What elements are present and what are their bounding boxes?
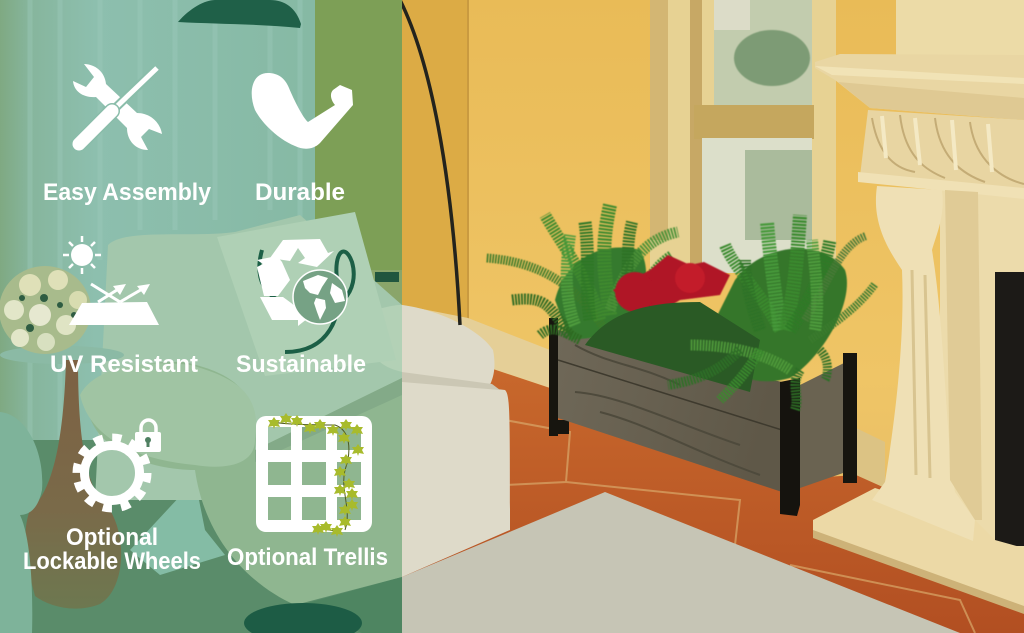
hearth [813,488,1024,612]
dark rug spot [244,603,362,633]
planter with plants [486,205,875,516]
window lower glass [702,138,812,273]
label: Optional Trellis: Optional Trellis [227,544,388,571]
planter back corner post [549,318,558,436]
olive wall area [315,0,402,320]
label: Durable: Durable [255,179,345,206]
label: Optional Lockable Wheels [23,524,201,575]
dark leaves centre [585,302,760,392]
fireplace chimney breast [896,0,1024,56]
pillow swirl [259,250,354,352]
globe [293,270,347,324]
pillow [217,212,396,376]
floor under sofa [300,577,402,633]
window frame [650,0,836,272]
firebox [995,272,1024,546]
red poinsettia [613,255,730,312]
skirting board [402,305,550,388]
icon: UV sun and reflecting surface [63,236,159,325]
small side table top [0,346,124,364]
floor area [0,440,402,633]
label: Easy Assembly: Easy Assembly [43,179,212,206]
fireplace inner wall [940,190,1024,560]
sofa seat and front [88,362,402,605]
sofa back [95,215,402,500]
floor lamp arc [400,0,460,325]
icon: recycling arrows and globe [257,239,347,326]
carved frieze [858,110,1024,199]
fern foliage right [668,215,875,410]
left armchair [0,412,42,633]
label: UV Resistant: UV Resistant [50,351,198,378]
icon: gear with padlock [77,420,161,508]
planter front wood boards [558,330,782,492]
curtain area [0,0,316,440]
label: Sustainable: Sustainable [236,351,366,378]
sofa right side [402,305,510,577]
label: Optional Lockable Wheels: Optional [66,524,158,551]
fern fronds left [486,205,678,340]
foliage mass [486,205,847,381]
label: Optional Lockable Wheels: Lockable Wheels [23,548,201,575]
fireplace column [872,186,975,541]
terracotta floor [402,368,1024,633]
panel: green overlay with features [0,0,402,633]
icon: trellis with ivy [256,413,372,537]
lamp shade [178,0,301,28]
mantel shelf [815,54,1024,120]
vase [25,360,121,609]
window upper glass [714,0,812,105]
room photo background [400,0,1024,633]
white rug [402,492,960,633]
sofa right arm [372,305,402,372]
metal corner posts [780,378,800,516]
planter side panel [800,362,846,488]
icon: flexed arm [252,73,353,149]
flowers [0,266,91,354]
icon: wrench and screwdriver [73,64,162,150]
